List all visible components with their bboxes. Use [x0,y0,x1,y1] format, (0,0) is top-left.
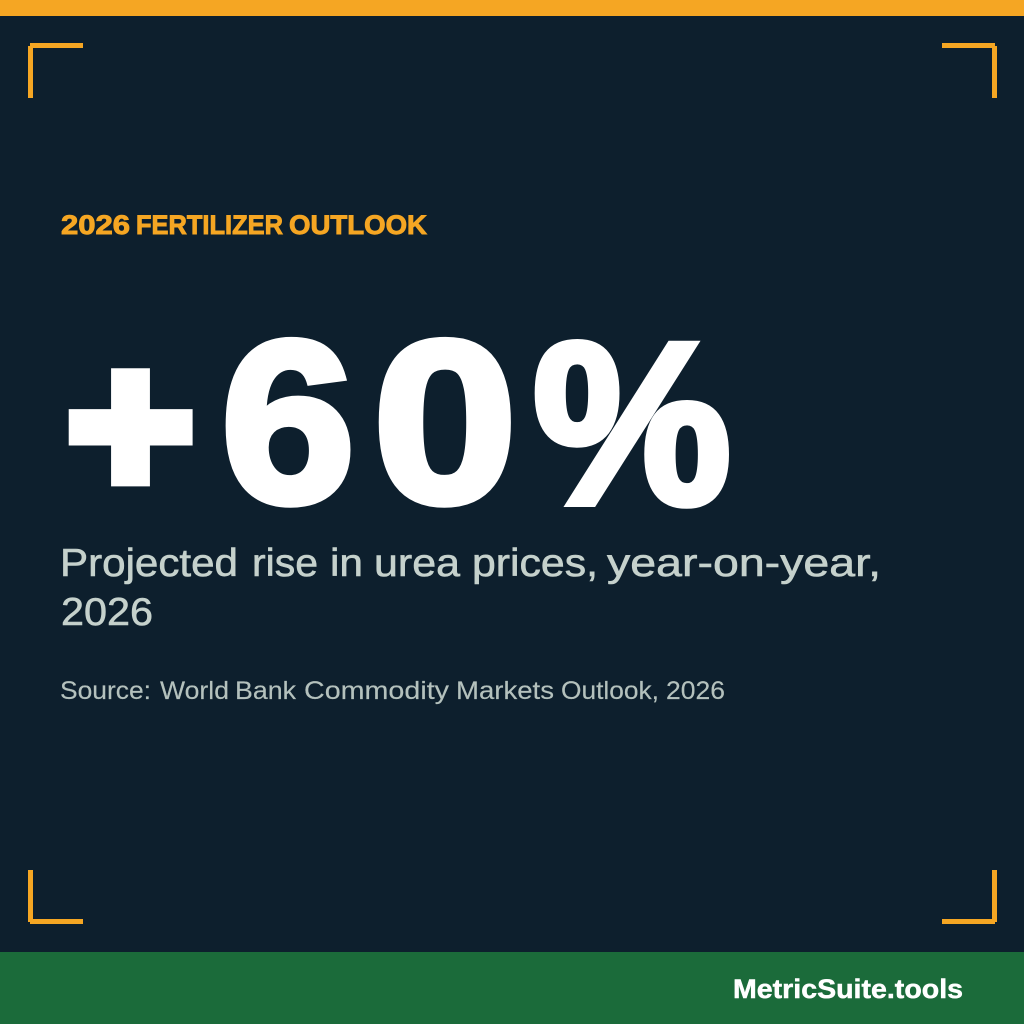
statistic description: prices, [472,542,598,585]
corner bracket: top right [942,43,997,98]
top accent bar [0,0,1024,16]
source note: Bank [235,677,297,705]
big statistic: % [533,295,731,552]
source note: World [160,677,229,705]
big statistic [67,294,731,552]
footer band [0,952,1024,1024]
source note: Source: [60,677,151,705]
corner bracket: top left [28,43,83,98]
statistic description: 2026 [61,591,153,634]
statistic description [60,542,881,634]
big statistic: 0 [373,294,517,550]
eyebrow heading: 2026 [61,210,130,240]
source note: 2026 [666,677,725,705]
eyebrow heading: OUTLOOK [289,210,427,240]
statistic description: rise [252,542,318,585]
statistic description: Projected [60,542,238,585]
big statistic: + [67,310,194,540]
source note: Commodity [304,677,450,705]
source note: Markets [456,677,554,705]
statistic description: urea [374,542,460,585]
footer brand label: MetricSuite.tools [733,974,963,1004]
corner bracket: bottom left [28,870,83,924]
statistic description: year-on-year, [607,542,881,585]
corner bracket: bottom right [942,870,997,924]
big statistic: 6 [221,294,355,550]
statistic description: in [330,542,363,585]
eyebrow heading: FERTILIZER [136,210,283,240]
source note: Outlook, [561,677,659,705]
